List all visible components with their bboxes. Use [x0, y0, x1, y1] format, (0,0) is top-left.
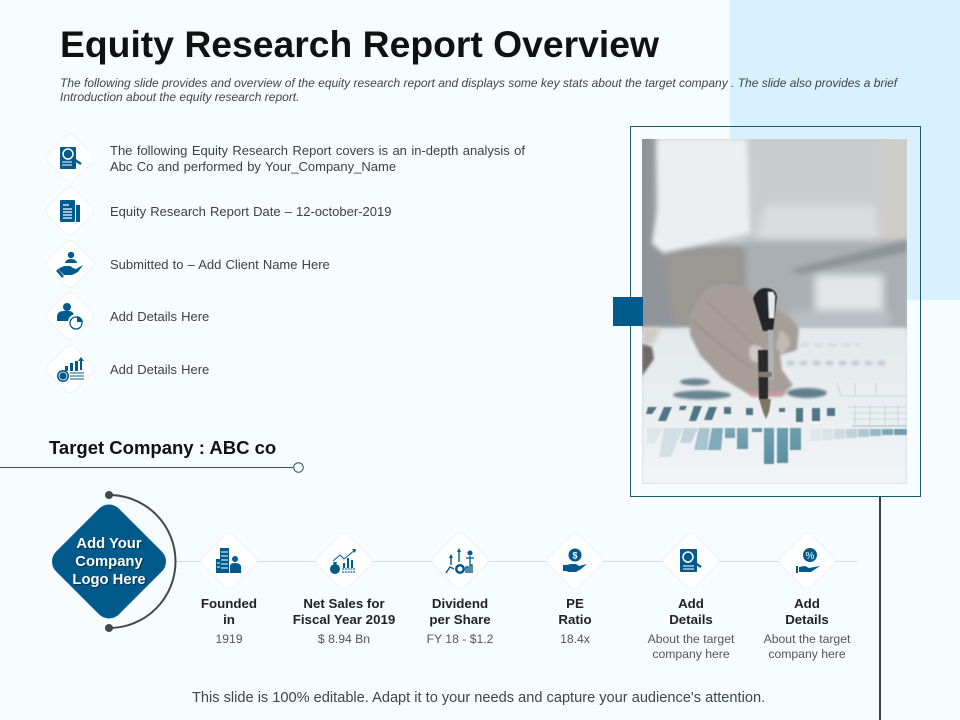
metric: details one [648, 533, 734, 660]
subtitle text: Introduction about the equity research report. [60, 90, 299, 104]
label: Add [794, 596, 820, 611]
label: Add [678, 596, 704, 611]
row: report date [46, 187, 391, 235]
title: Equity Research Report Overview [60, 23, 659, 65]
logo text [72, 536, 146, 588]
icon: building and person [200, 533, 258, 589]
label: Ratio [558, 612, 592, 627]
label [669, 596, 713, 627]
value: 18.4x [560, 632, 590, 646]
pen [753, 288, 777, 331]
value: 1919 [215, 632, 243, 646]
label: Dividend [432, 596, 488, 611]
metric: dividend [427, 533, 493, 646]
icon: person with pie [46, 292, 94, 340]
description: About the target [648, 632, 734, 646]
icon: arrows and coin [432, 533, 488, 589]
text: report coverage: The following Equity Research Report covers is an in-depth analysis of [110, 143, 525, 158]
logo text: Logo Here [72, 572, 146, 588]
label [558, 596, 592, 627]
icon: percent on hand: % [806, 551, 815, 562]
label: in [223, 612, 235, 627]
small bars [646, 406, 835, 422]
label: Details [785, 612, 829, 627]
icon: coin on hand: $ [572, 550, 578, 560]
row: report coverage [46, 134, 525, 182]
metric: founded [200, 533, 258, 646]
subtitle text: The following slide provides and overview of the equity research report and displays some key stats about the target company . The slide also provides a brief [60, 76, 897, 90]
icon: report with magnifier [46, 134, 94, 182]
text: details two: Add Details Here [110, 362, 209, 377]
icon: report with magnifier [662, 533, 720, 589]
description: company here [768, 646, 846, 660]
metric: details two [764, 533, 850, 660]
logo text: Company [75, 554, 143, 570]
heading rule with end circle [0, 462, 304, 473]
photo frame with image [630, 126, 921, 497]
text: report coverage: Abc Co and performed by Your_Company_Name [110, 159, 396, 174]
icon: person on hand [46, 240, 94, 288]
light blue corner panel [730, 0, 960, 300]
table grids [837, 383, 907, 425]
metric: PE ratio [546, 533, 604, 646]
description: About the target [764, 632, 850, 646]
hand [690, 284, 799, 392]
label: Founded [201, 596, 257, 611]
logo text: Add Your [76, 536, 142, 552]
icon: percent on hand [778, 533, 836, 589]
company logo badge [52, 491, 176, 632]
label: Net Sales for [303, 596, 385, 611]
row: details two [46, 345, 209, 393]
photo [642, 139, 907, 484]
label [785, 596, 829, 627]
value: $ 8.94 Bn [318, 632, 370, 646]
label [293, 596, 395, 627]
row: details one [46, 292, 209, 340]
vertical rule [879, 497, 881, 720]
icon: coin on hand [546, 533, 604, 589]
large bars [647, 428, 663, 443]
description: company here [652, 646, 730, 660]
text: report date: Equity Research Report Date – 12-october-2019 [110, 204, 391, 219]
icon: document [46, 187, 94, 235]
description [764, 632, 850, 660]
row: submitted to [46, 240, 330, 288]
section heading: Target Company : ABC co [49, 437, 276, 458]
text: details one: Add Details Here [110, 309, 209, 324]
subtitle text [60, 76, 898, 104]
blue square accent [613, 297, 643, 326]
label: PE [566, 596, 584, 611]
icon: coin and bars [46, 345, 94, 393]
label: Details [669, 612, 713, 627]
metric: net sales [293, 533, 395, 646]
label [429, 596, 491, 627]
frame outline [630, 126, 920, 496]
text: report coverage [110, 143, 525, 174]
footer note: This slide is 100% editable. Adapt it to your needs and capture your audience's attention. [192, 690, 765, 706]
value: FY 18 - $1.2 [427, 632, 493, 646]
table charts [680, 378, 710, 386]
label: Fiscal Year 2019 [293, 612, 395, 627]
icon: money bag and chart [316, 533, 372, 589]
label [201, 596, 257, 627]
connector line [176, 561, 858, 562]
arc with dots and diamond [52, 491, 176, 632]
description [648, 632, 734, 660]
text: submitted to: Submitted to – Add Client Name Here [110, 257, 330, 272]
label: per Share [429, 612, 491, 627]
